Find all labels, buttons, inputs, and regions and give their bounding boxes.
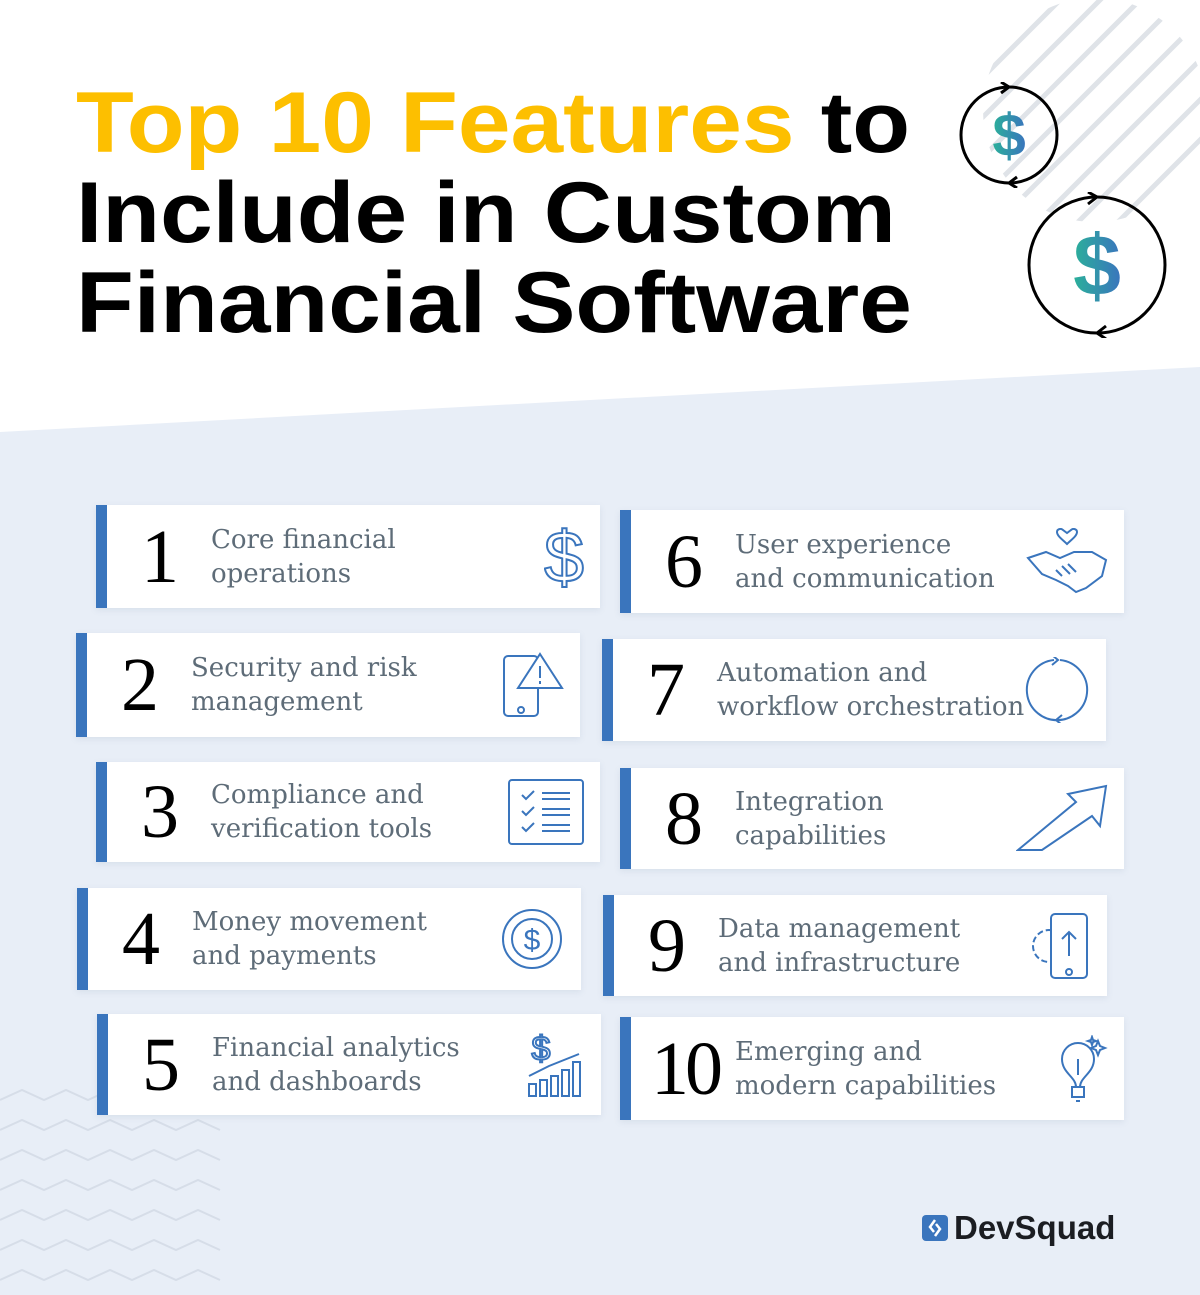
card 1: Core financial — [211, 524, 396, 554]
card 7: workflow orchestration — [717, 692, 1024, 722]
title: Include in Custom — [76, 165, 896, 261]
card 3: 3 — [141, 770, 179, 854]
card 4: 4 — [122, 897, 160, 981]
card 4 — [77, 888, 581, 990]
card 8 — [620, 768, 1124, 869]
card 4: Money movement — [192, 907, 427, 937]
card 3: Compliance and — [211, 780, 424, 810]
card 2: 2 — [121, 643, 159, 727]
card 6: User experience — [735, 530, 951, 560]
card 9 — [603, 895, 1107, 996]
icon: handshake — [1026, 528, 1108, 594]
card 4: and payments — [192, 941, 377, 971]
card 6: and communication — [735, 564, 995, 594]
card 2 — [76, 633, 580, 737]
icon: analytics bars — [528, 1030, 581, 1097]
icon: dollar exchange large: $ — [1073, 218, 1121, 314]
card 6 — [620, 510, 1124, 613]
icon: analytics bars: $ — [532, 1030, 551, 1068]
card 2: management — [191, 687, 363, 717]
card 7 — [602, 639, 1106, 741]
icon: dollar exchange small — [960, 82, 1058, 188]
card 10 — [620, 1017, 1124, 1120]
icon: up-right arrow — [1016, 784, 1108, 851]
card 10: Emerging and — [735, 1036, 922, 1066]
icon: cycle arrows — [1026, 657, 1088, 723]
title: Top 10 Features to — [76, 75, 910, 171]
icon: dollar exchange small: $ — [992, 102, 1026, 169]
card 1 — [96, 505, 600, 608]
card 5: and dashboards — [212, 1066, 422, 1096]
card 9: and infrastructure — [718, 948, 960, 978]
card 7: 7 — [647, 648, 685, 732]
icon: dollar exchange large — [1028, 192, 1166, 338]
title — [76, 75, 912, 351]
card 7: Automation and — [717, 658, 927, 688]
card 8: capabilities — [735, 820, 886, 850]
icon: checklist — [508, 779, 584, 845]
card 2: Security and risk — [191, 653, 417, 683]
icon: phone warning — [503, 652, 564, 717]
card 8: Integration — [735, 786, 884, 816]
card 6: 6 — [665, 520, 703, 604]
title: Financial Software — [76, 255, 912, 351]
icon: gear phone — [1032, 913, 1088, 979]
card 5 — [97, 1014, 601, 1115]
card 10: 10 — [651, 1026, 719, 1110]
card 5: 5 — [142, 1022, 180, 1106]
card 8: 8 — [665, 776, 703, 860]
card 1: operations — [211, 558, 351, 588]
icon: lightbulb — [1061, 1035, 1108, 1102]
icon: circular dollar: $ — [524, 924, 541, 957]
card 10: modern capabilities — [735, 1070, 996, 1100]
card 5: Financial analytics — [212, 1032, 460, 1062]
card 1: 1 — [141, 514, 179, 598]
card 9: 9 — [648, 904, 686, 988]
card 3: verification tools — [211, 814, 432, 844]
card 9: Data management — [718, 914, 960, 944]
logo: DevSquad: DevSquad — [954, 1209, 1115, 1246]
card 3 — [96, 762, 600, 862]
icon: circular dollar — [502, 909, 562, 969]
